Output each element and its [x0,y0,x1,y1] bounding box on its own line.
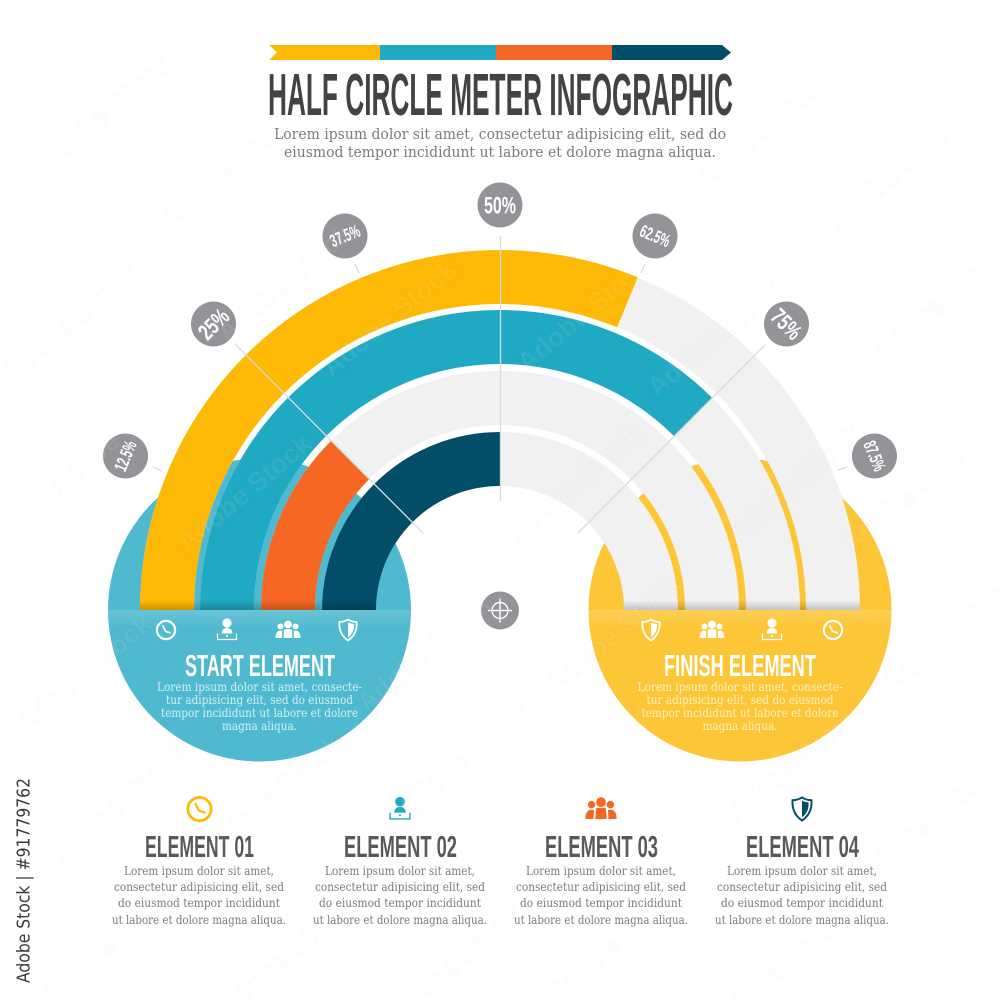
stock watermark pattern: Adobe Stock [351,588,498,718]
track: gray background bands [167,277,833,610]
percent connector lines [153,236,847,533]
finish element text: tur adipisicing elit, sed do eiusmod [646,692,834,707]
stock watermark pattern: Adobe Stock [46,738,193,868]
start element text: magna aliqua. [222,718,297,733]
arc: orange 25% [288,460,350,610]
stock watermark pattern: Adobe Stock [721,698,868,828]
element 04 text: ut labore et dolore magna aliqua. [715,912,889,927]
meter arcs [167,277,833,610]
stock watermark pattern: Adobe Stock [511,248,658,378]
element 01 text: ut labore et dolore magna aliqua. [112,912,286,927]
percent marker 12.5% [96,427,155,485]
stock watermark pattern: Adobe Stock [541,568,688,698]
stock watermark pattern: Adobe Stock [211,218,358,348]
panel: element 01 [112,797,286,927]
start circle [108,458,411,762]
finish element text: tempor incididunt ut labore et dolore [642,705,838,720]
element 02 heading: ELEMENT 02 [344,829,457,864]
finish element text [638,679,842,733]
element 02 text: Lorem ipsum dolor sit amet, [325,863,475,878]
start element heading: START ELEMENT [185,648,335,683]
panel: element 02 [313,797,487,927]
element 04 text [715,863,889,927]
icon: shield [792,797,812,821]
finish element text: Lorem ipsum dolor sit amet, consecte- [638,679,842,694]
percent marker 75%: 75% [766,303,807,345]
element 01 heading: ELEMENT 01 [145,829,254,864]
element 04 text: consectetur adipisicing elit, sed [717,879,887,894]
percent marker 62.5% [626,207,684,265]
stock watermark pattern: Adobe Stock [821,108,968,238]
subtitle: Lorem ipsum dolor sit amet, consectetur adipisicing elit, sed do [274,125,726,143]
start element text: tur adipisicing elit, sed do eiusmod [166,692,353,707]
percent marker 12.5%: 12.5% [110,438,141,474]
element 01 text: do eiusmod tempor incididunt [118,895,280,910]
start element text: Lorem ipsum dolor sit amet, consecte- [157,679,362,694]
element 02 text: consectetur adipisicing elit, sed [315,879,485,894]
stock watermark pattern: Adobe Stock [721,418,868,548]
subtitle [274,125,726,161]
percent marker 87.5% [845,427,904,485]
element 01 text: consectetur adipisicing elit, sed [114,879,284,894]
element 03 text [514,863,688,927]
stock watermark pattern: Adobe Stock [171,428,318,558]
stock watermark pattern: Adobe Stock [691,63,838,193]
panel: element 04 [715,797,889,927]
element 04 text: do eiusmod tempor incididunt [721,895,883,910]
percent marker 37.5%: 37.5% [327,221,363,251]
element 01 text [112,863,286,927]
element 02 text: ut labore et dolore magna aliqua. [313,912,487,927]
finish circle [588,458,892,762]
stock id caption: Adobe Stock | #91779762 [14,778,34,983]
stock watermark pattern: Adobe Stock [501,418,648,548]
stock watermark pattern: Adobe Stock [836,428,983,558]
element 03 text: Lorem ipsum dolor sit amet, [526,863,676,878]
percent marker 50%: 50% [484,192,516,220]
stock watermark pattern: Adobe Stock [641,273,788,403]
arc base shadows [140,600,860,610]
stock watermark pattern: Adobe Stock [316,253,463,383]
stock watermark pattern: Adobe Stock [201,728,348,858]
circle highlight bands [108,610,892,623]
element 02 text [313,863,487,927]
element 03 heading: ELEMENT 03 [545,829,658,864]
element 03 text: consectetur adipisicing elit, sed [516,879,686,894]
element 03 text: ut labore et dolore magna aliqua. [514,912,688,927]
finish element icons [642,618,842,640]
percent marker 62.5%: 62.5% [637,221,673,251]
header ribbon bar [269,45,731,60]
subtitle: eiusmod tempor incididunt ut labore et dolore magna aliqua. [284,143,716,161]
icon: center target [481,592,519,630]
panel: element 03 [514,797,688,927]
icon: person at laptop [390,797,410,819]
stock watermark pattern: Adobe Stock [156,103,303,233]
element 04 text: Lorem ipsum dolor sit amet, [727,863,877,878]
percent marker 25%: 25% [193,303,234,345]
arc: dark blue 50% [349,459,500,610]
finish element heading: FINISH ELEMENT [664,648,816,683]
stock watermark pattern: Adobe Stock [31,48,178,178]
arc: blue 75% [227,337,693,610]
start element text [157,679,362,733]
finish element text: magna aliqua. [702,718,778,733]
stock watermark pattern: Adobe Stock [11,608,158,738]
icon: group of people [585,797,617,819]
percent marker 37.5% [316,207,374,265]
start element icons [157,618,357,640]
stock watermark pattern: Adobe Stock [41,373,188,503]
percent marker 75% [755,292,818,356]
element 03 text: do eiusmod tempor incididunt [520,895,682,910]
stock watermark pattern: Adobe Stock [391,693,538,823]
start element text: tempor incididunt ut labore et dolore [161,705,358,720]
element 04 heading: ELEMENT 04 [746,829,859,864]
stock watermark pattern: Adobe Stock [0,258,143,388]
arc: yellow 62.5% [167,277,627,610]
stock watermark pattern: Adobe Stock [851,758,998,888]
percent marker 25% [182,292,245,356]
percent marker 50% [478,182,522,228]
icon: clock [188,797,211,821]
element 01 text: Lorem ipsum dolor sit amet, [124,863,274,878]
element 02 text: do eiusmod tempor incididunt [319,895,481,910]
percent marker 87.5%: 87.5% [859,438,890,474]
